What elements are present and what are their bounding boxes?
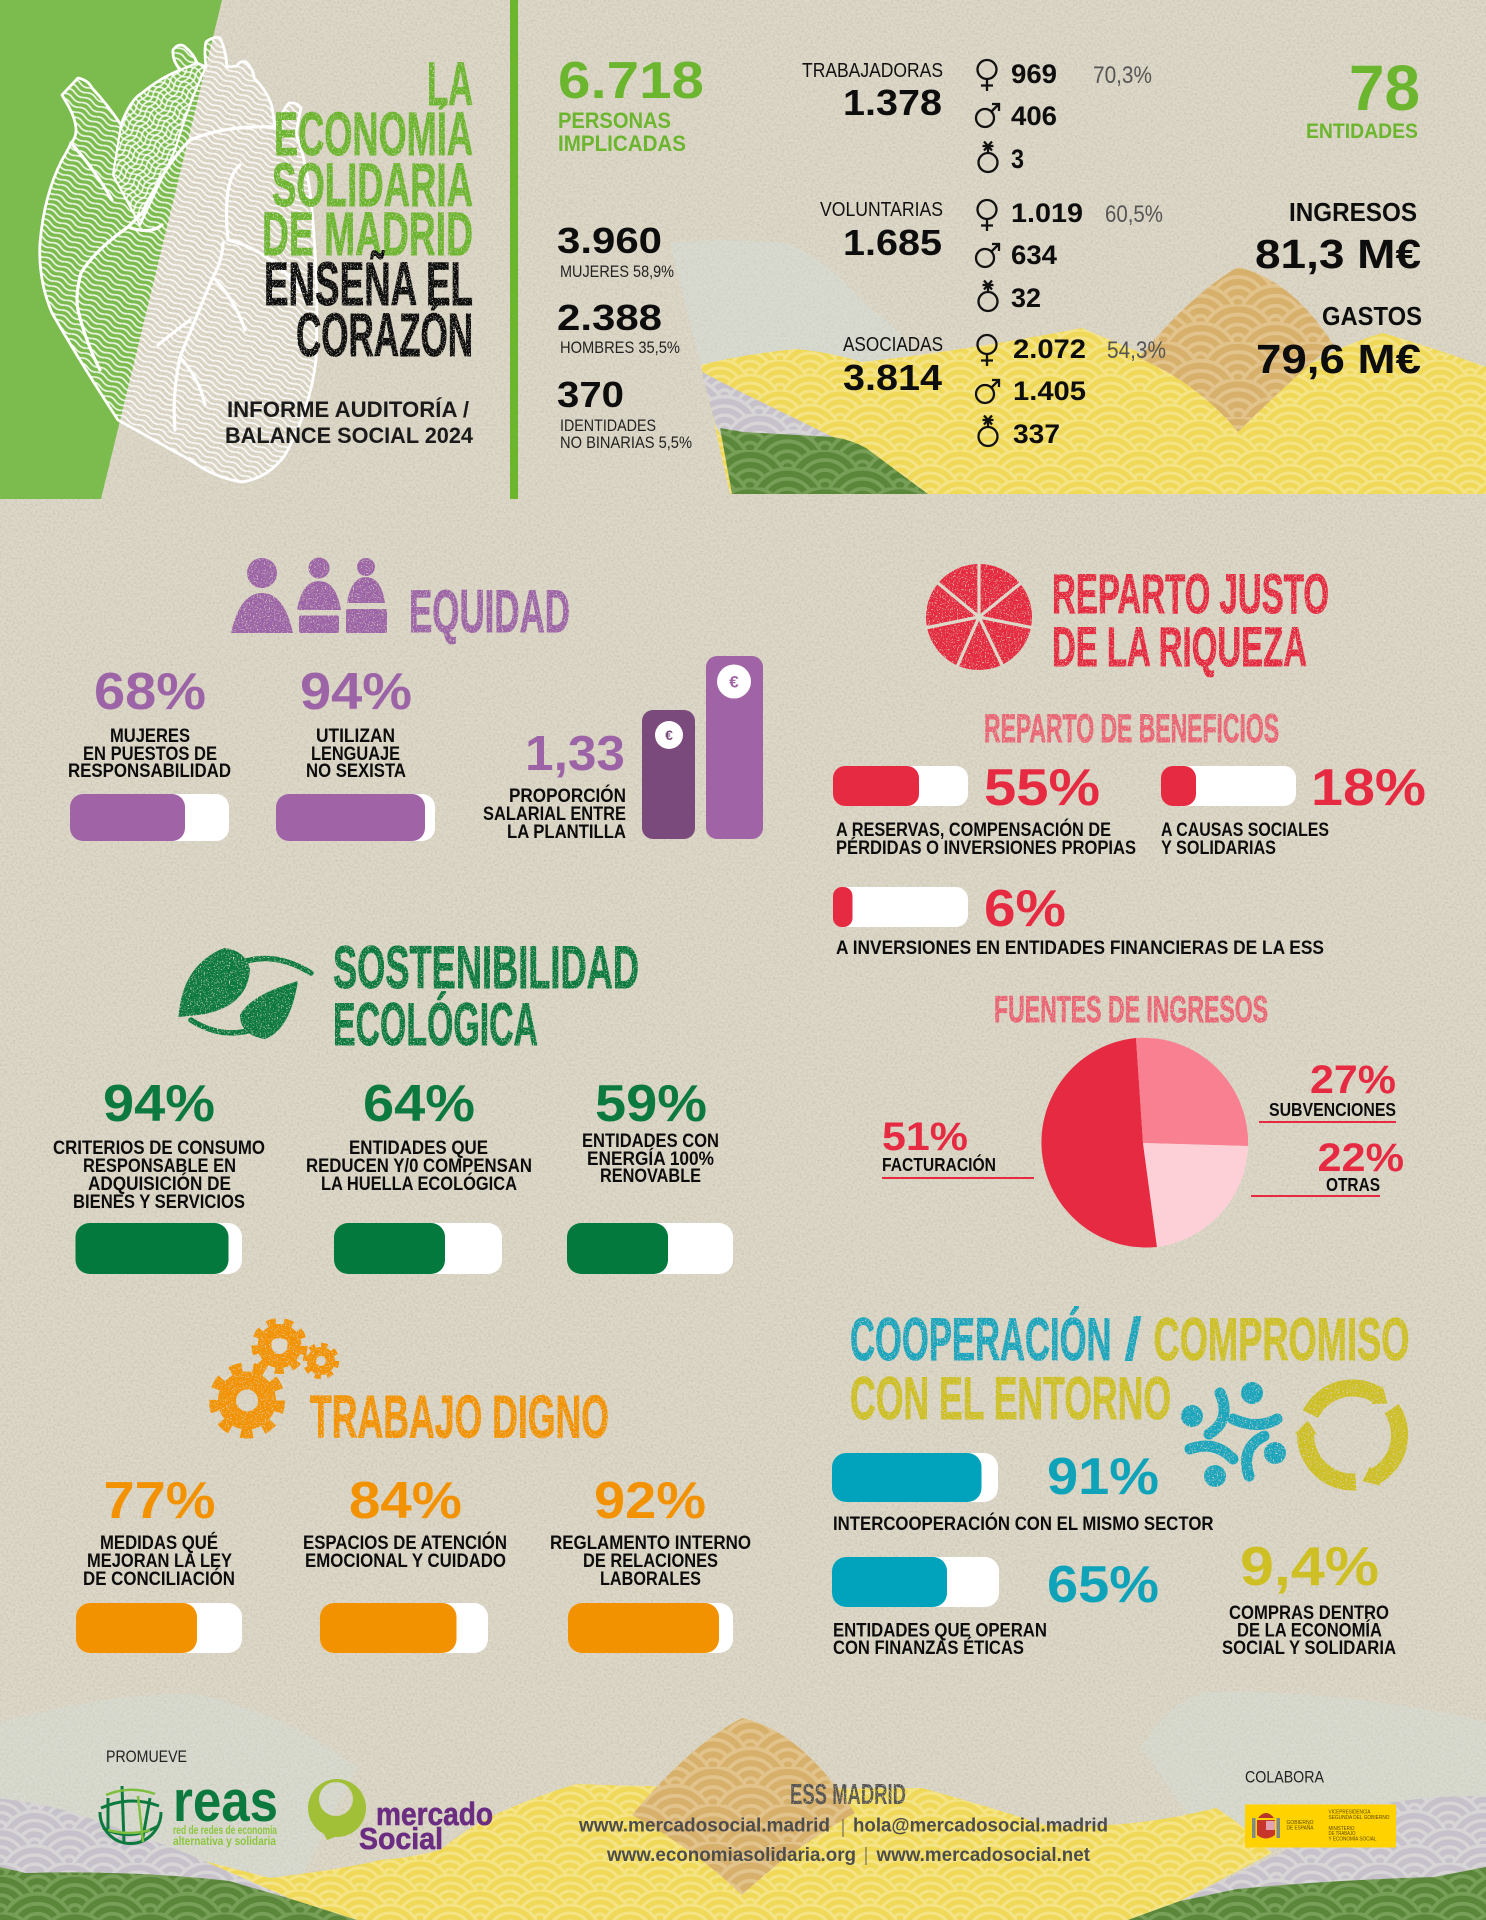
stat: trabajadoras: 406 bbox=[1011, 101, 1057, 131]
subtitle bbox=[225, 397, 474, 448]
stat: 1,33 proporcion salarial bbox=[483, 727, 626, 843]
stat: 77% conciliacion: MEDIDAS QUÉ bbox=[100, 1532, 218, 1554]
stat: 94% lenguaje no sexista: LENGUAJE bbox=[311, 744, 400, 765]
stat: 59% energia renovable: RENOVABLE bbox=[600, 1166, 701, 1187]
stat: 59% energia renovable: ENTIDADES CON bbox=[582, 1131, 719, 1152]
stat: 65% finanzas eticas: ENTIDADES QUE OPERAN bbox=[833, 1620, 1047, 1642]
heading: cooperacion compromiso bbox=[850, 1306, 1410, 1432]
stat: 94% consumo responsable: BIENES Y SERVICIOS bbox=[73, 1192, 245, 1213]
stat: asociadas: ASOCIADAS bbox=[843, 334, 943, 356]
stat: 84% atencion emocional: 84% bbox=[349, 1472, 462, 1530]
heading: reparto justo de la riqueza bbox=[925, 562, 1329, 678]
stat: trabajadoras: 70,3% bbox=[1093, 62, 1152, 89]
stat: mujeres: MUJERES 58,9% bbox=[560, 262, 674, 281]
stat: 6% entidades financieras bbox=[833, 880, 1324, 959]
stat: voluntarias: 634 bbox=[1011, 240, 1057, 270]
green header panel bbox=[0, 0, 222, 499]
logo: mercado social: Social bbox=[359, 1821, 443, 1856]
stat: 55% reservas: 55% bbox=[984, 759, 1100, 817]
stat: 59% energia renovable: ENERGÍA 100% bbox=[587, 1148, 714, 1170]
footer contact: www.mercadosocial.net bbox=[876, 1845, 1091, 1866]
logo: gobierno de españa: Y ECONOMÍA SOCIAL bbox=[1328, 1836, 1376, 1842]
logo: gobierno de españa: DE TRABAJO bbox=[1328, 1831, 1356, 1837]
title: LA bbox=[427, 50, 473, 118]
stat: 59% energia renovable: 59% bbox=[595, 1075, 707, 1133]
stat: 64% huella ecologica: 64% bbox=[363, 1075, 475, 1133]
stat: 65% finanzas eticas: 65% bbox=[1047, 1556, 1159, 1614]
logo: reas: reas bbox=[173, 1769, 278, 1834]
footer contact: www.economiasolidaria.org bbox=[606, 1845, 856, 1866]
stat: identidades no binarias: IDENTIDADES bbox=[560, 416, 656, 435]
heading: reparto justo de la riqueza: DE LA RIQUEZA bbox=[1052, 615, 1307, 678]
label: 51% facturacion: FACTURACIÓN bbox=[882, 1154, 996, 1175]
stat: asociadas bbox=[843, 334, 1166, 449]
stat: 77% conciliacion: 77% bbox=[104, 1472, 216, 1530]
stat: 77% conciliacion: DE CONCILIACIÓN bbox=[83, 1568, 235, 1590]
stat: 55% reservas: PÉRDIDAS O INVERSIONES PROPIAS bbox=[836, 837, 1136, 859]
stat: 1,33 proporcion salarial: LA PLANTILLA bbox=[507, 822, 626, 843]
stat: 59% energia renovable bbox=[567, 1075, 733, 1274]
stat: 91% intercooperacion bbox=[832, 1448, 1214, 1535]
stat: voluntarias: VOLUNTARIAS bbox=[820, 199, 943, 221]
stat: 92% reglamento interno: LABORALES bbox=[600, 1569, 701, 1590]
stat: personas implicadas: IMPLICADAS bbox=[558, 131, 686, 156]
stat: ingresos: 81,3 M€ bbox=[1255, 231, 1421, 277]
subheading: reparto de beneficios: REPARTO DE BENEFICIOS bbox=[984, 707, 1279, 751]
logo: gobierno de españa: GOBIERNO bbox=[1286, 1820, 1314, 1826]
stat: personas implicadas: 6.718 bbox=[558, 52, 704, 110]
stat: 91% intercooperacion: 91% bbox=[1047, 1448, 1159, 1506]
logo: gobierno de españa bbox=[1245, 1804, 1396, 1848]
stat: voluntarias: 60,5% bbox=[1105, 201, 1163, 228]
heading: trabajo digno bbox=[214, 1322, 609, 1450]
chart: salary bars bbox=[642, 656, 763, 839]
illustration: anatomical heart bbox=[40, 38, 317, 482]
stat: 1,33 proporcion salarial: 1,33 bbox=[525, 727, 625, 781]
subtitle: BALANCE SOCIAL 2024 bbox=[225, 423, 474, 448]
stat: trabajadoras: 969 bbox=[1011, 59, 1057, 89]
stat: 55% reservas: A RESERVAS, COMPENSACIÓN DE bbox=[836, 819, 1111, 841]
stat: gastos: 79,6 M€ bbox=[1256, 336, 1421, 382]
label: 27% subvenciones bbox=[1259, 1058, 1396, 1123]
heading: sostenibilidad ecologica: ECOLÓGICA bbox=[333, 991, 538, 1058]
heading: trabajo digno: TRABAJO DIGNO bbox=[310, 1384, 609, 1450]
heading: cooperacion compromiso: CON EL ENTORNO bbox=[850, 1365, 1171, 1432]
stat: trabajadoras: 3 bbox=[1011, 144, 1024, 174]
logo: gobierno de españa: MINISTERIO bbox=[1328, 1826, 1355, 1832]
title: ENSEÑA EL bbox=[264, 250, 473, 318]
stat: 94% consumo responsable bbox=[53, 1075, 265, 1274]
label: promueve: PROMUEVE bbox=[106, 1747, 187, 1766]
footer contact: hola@mercadosocial.madrid bbox=[853, 1816, 1108, 1836]
stat: ingresos bbox=[1255, 197, 1421, 277]
icon: leaves bbox=[178, 948, 311, 1039]
stat: gastos: GASTOS bbox=[1322, 301, 1422, 331]
logo: gobierno de españa: VICEPRESIDENCIA bbox=[1328, 1810, 1371, 1816]
logo: reas: red de redes de economía bbox=[173, 1823, 277, 1837]
logo: mercado social bbox=[308, 1779, 493, 1856]
icon: people bbox=[231, 558, 387, 633]
logo: reas bbox=[100, 1769, 278, 1848]
heading: sostenibilidad ecologica bbox=[178, 934, 639, 1058]
stat: entidades: ENTIDADES bbox=[1306, 120, 1418, 143]
stat: 94% consumo responsable: CRITERIOS DE CONSUMO bbox=[53, 1138, 265, 1159]
stat: 94% lenguaje no sexista: NO SEXISTA bbox=[306, 761, 406, 782]
stat: trabajadoras bbox=[802, 59, 1152, 174]
stat: 84% atencion emocional: ESPACIOS DE ATENCIÓN bbox=[303, 1532, 507, 1554]
stat: 65% finanzas eticas: CON FINANZAS ÉTICAS bbox=[833, 1637, 1024, 1659]
stat: 1,33 proporcion salarial: PROPORCIÓN bbox=[509, 785, 626, 807]
stat: 68% mujeres responsabilidad: EN PUESTOS DE bbox=[83, 744, 217, 765]
label: 51% facturacion bbox=[882, 1115, 1034, 1179]
stat: asociadas: 3.814 bbox=[843, 357, 942, 398]
stat: 68% mujeres responsabilidad bbox=[68, 663, 231, 841]
stat: 94% lenguaje no sexista bbox=[276, 663, 435, 841]
stat: 18% causas sociales bbox=[1161, 759, 1426, 859]
label: 51% facturacion: 51% bbox=[882, 1115, 968, 1159]
stat: 92% reglamento interno: 92% bbox=[594, 1472, 706, 1530]
stat: 77% conciliacion: MEJORAN LA LEY bbox=[87, 1551, 232, 1572]
stat: 94% lenguaje no sexista: UTILIZAN bbox=[316, 726, 395, 747]
divider bar bbox=[510, 0, 518, 499]
label: 22% otras: 22% bbox=[1318, 1136, 1404, 1180]
stat: 91% intercooperacion: INTERCOOPERACIÓN CON EL MISMO SECTOR bbox=[833, 1513, 1214, 1535]
stat: 9,4% compras bbox=[1222, 1535, 1396, 1659]
stat: 9,4% compras: COMPRAS DENTRO bbox=[1229, 1603, 1389, 1624]
subtitle: INFORME AUDITORÍA / bbox=[227, 397, 469, 422]
stat: 92% reglamento interno: DE RELACIONES bbox=[583, 1551, 718, 1572]
stat: entidades bbox=[1306, 52, 1420, 143]
stat: 92% reglamento interno bbox=[550, 1472, 751, 1653]
stat: asociadas: 1.405 bbox=[1013, 376, 1086, 406]
label: 22% otras: OTRAS bbox=[1326, 1175, 1380, 1195]
stat: 18% causas sociales: A CAUSAS SOCIALES bbox=[1161, 820, 1329, 841]
stat: mujeres bbox=[557, 220, 674, 281]
title: SOLIDARIA bbox=[272, 151, 473, 219]
title bbox=[262, 50, 473, 369]
header landscape illustration bbox=[670, 240, 1486, 494]
stat: personas implicadas: PERSONAS bbox=[558, 108, 671, 133]
stat: voluntarias: 32 bbox=[1011, 283, 1041, 313]
chart: salary bars: € bbox=[729, 672, 739, 692]
label: 27% subvenciones: SUBVENCIONES bbox=[1269, 1100, 1396, 1120]
subheading: fuentes de ingresos: FUENTES DE INGRESOS bbox=[994, 989, 1268, 1030]
stat: 64% huella ecologica: REDUCEN Y/0 COMPENSAN bbox=[306, 1156, 532, 1177]
stat: 9,4% compras: 9,4% bbox=[1240, 1535, 1379, 1597]
logo: mercado social: mercado bbox=[376, 1796, 493, 1832]
heading: cooperacion compromiso: COOPERACIÓN bbox=[850, 1306, 1112, 1373]
heading: equidad bbox=[231, 558, 570, 645]
stat: asociadas: 54,3% bbox=[1107, 337, 1166, 364]
logo: gobierno de españa: SEGUNDA DEL GOBIERNO bbox=[1328, 1815, 1390, 1821]
stat: 92% reglamento interno: REGLAMENTO INTERNO bbox=[550, 1533, 751, 1554]
stat: trabajadoras: 1.378 bbox=[843, 82, 942, 123]
stat: 64% huella ecologica bbox=[306, 1075, 532, 1274]
stat: personas implicadas bbox=[558, 52, 704, 156]
stat: voluntarias: 1.019 bbox=[1011, 198, 1083, 228]
title: ECONOMÍA bbox=[274, 100, 473, 168]
icon: recycle ring bbox=[1287, 1370, 1418, 1500]
stat: entidades: 78 bbox=[1349, 52, 1420, 124]
footer contact bbox=[578, 1779, 1108, 1866]
stat: identidades no binarias: NO BINARIAS 5,5% bbox=[560, 433, 692, 452]
stat: 84% atencion emocional: EMOCIONAL Y CUIDADO bbox=[305, 1551, 506, 1572]
stat: 64% huella ecologica: LA HUELLA ECOLÓGICA bbox=[321, 1173, 517, 1195]
stat: identidades no binarias: 370 bbox=[557, 374, 624, 415]
icon: cooperation people bbox=[1181, 1382, 1286, 1487]
stat: 18% causas sociales: 18% bbox=[1311, 759, 1426, 817]
stat: 68% mujeres responsabilidad: MUJERES bbox=[110, 726, 190, 747]
icon: gears bbox=[214, 1322, 337, 1434]
stat: 9,4% compras: DE LA ECONOMÍA bbox=[1237, 1620, 1382, 1642]
stat: asociadas: 2.072 bbox=[1013, 334, 1086, 364]
logo: reas: alternativa y solidaria bbox=[173, 1834, 276, 1848]
stat: 68% mujeres responsabilidad: 68% bbox=[94, 663, 206, 721]
stat: 18% causas sociales: Y SOLIDARIAS bbox=[1161, 838, 1276, 859]
title: CORAZÓN bbox=[296, 301, 473, 369]
stat: 94% lenguaje no sexista: 94% bbox=[300, 663, 412, 721]
stat: 65% finanzas eticas bbox=[832, 1556, 1159, 1659]
stat: 9,4% compras: SOCIAL Y SOLIDARIA bbox=[1222, 1638, 1396, 1659]
stat: 94% consumo responsable: RESPONSABLE EN bbox=[83, 1156, 236, 1177]
stat: hombres bbox=[557, 297, 680, 357]
stat: 6% entidades financieras: A INVERSIONES EN ENTIDADES FINANCIERAS DE LA ESS bbox=[836, 938, 1324, 959]
stat: voluntarias: 1.685 bbox=[843, 222, 942, 263]
stat: identidades no binarias bbox=[557, 374, 692, 452]
footer landscape illustration bbox=[0, 1692, 1486, 1920]
stat: 68% mujeres responsabilidad: RESPONSABILIDAD bbox=[68, 761, 231, 782]
icon: pie bbox=[925, 562, 1034, 670]
heading: sostenibilidad ecologica: SOSTENIBILIDAD bbox=[333, 934, 639, 1001]
stat: hombres: 2.388 bbox=[557, 297, 662, 338]
stat: hombres: HOMBRES 35,5% bbox=[560, 338, 680, 357]
footer contact: ESS MADRID bbox=[790, 1779, 906, 1811]
heading: cooperacion compromiso: / bbox=[1124, 1306, 1142, 1373]
stat: voluntarias bbox=[820, 198, 1163, 313]
label: colabora: COLABORA bbox=[1245, 1768, 1325, 1786]
title: DE MADRID bbox=[262, 200, 473, 268]
stat: ingresos: INGRESOS bbox=[1289, 197, 1417, 227]
stat: 77% conciliacion bbox=[76, 1472, 242, 1653]
stat: 55% reservas bbox=[833, 759, 1136, 859]
label: 27% subvenciones: 27% bbox=[1310, 1058, 1396, 1102]
stat: 64% huella ecologica: ENTIDADES QUE bbox=[349, 1138, 488, 1159]
stat: asociadas: 337 bbox=[1013, 419, 1060, 449]
logo: gobierno de españa: DE ESPAÑA bbox=[1286, 1824, 1314, 1832]
stat: mujeres: 3.960 bbox=[557, 220, 662, 261]
stat: 6% entidades financieras: 6% bbox=[984, 880, 1066, 938]
label: 22% otras bbox=[1251, 1136, 1404, 1197]
heading: equidad: EQUIDAD bbox=[409, 578, 570, 645]
stat: 1,33 proporcion salarial: SALARIAL ENTRE bbox=[483, 804, 626, 825]
chart: salary bars: € bbox=[665, 727, 673, 743]
stat: trabajadoras: TRABAJADORAS bbox=[802, 60, 943, 82]
stat: 94% consumo responsable: 94% bbox=[103, 1075, 215, 1133]
stat: 94% consumo responsable: ADQUISICIÓN DE bbox=[88, 1173, 231, 1195]
footer contact: www.mercadosocial.madrid bbox=[578, 1816, 830, 1836]
stat: gastos bbox=[1256, 301, 1422, 382]
chart: fuentes de ingresos pie bbox=[1041, 1038, 1248, 1248]
stat: 84% atencion emocional bbox=[303, 1472, 507, 1653]
